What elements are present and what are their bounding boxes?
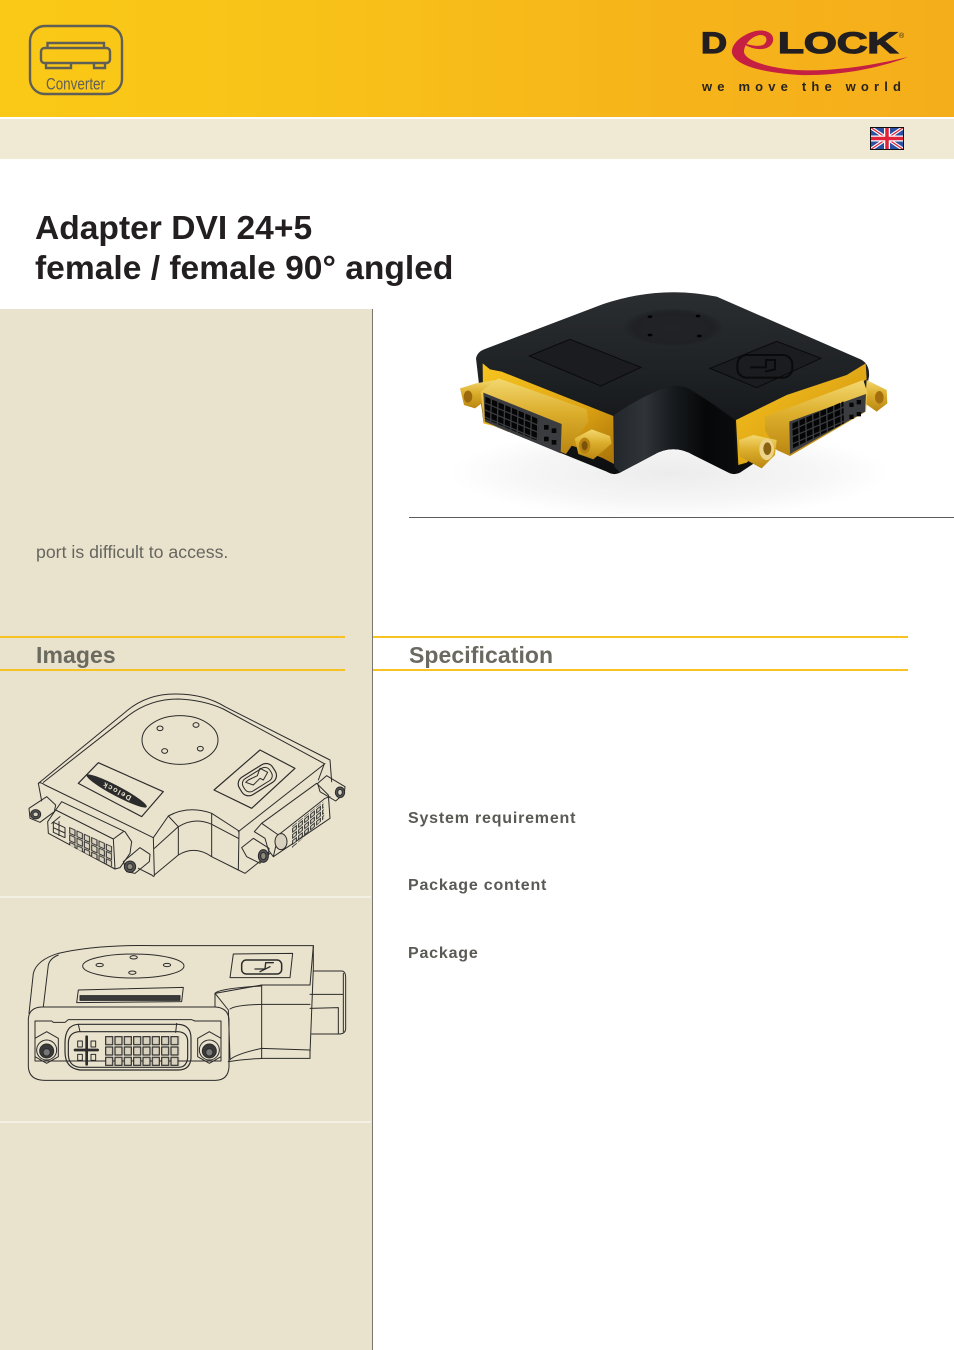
icon: UK flag — [870, 127, 904, 150]
title: Adapter DVI 24+5 — [35, 210, 312, 247]
body outline — [38, 694, 332, 783]
heading: Specification: Specification — [409, 642, 553, 668]
right screw back — [318, 776, 345, 801]
front face — [28, 1007, 229, 1080]
cross contact — [75, 1037, 98, 1064]
divider 2 — [0, 1121, 371, 1123]
top recessed circle — [623, 309, 723, 348]
product photo — [460, 292, 888, 504]
left screw back — [29, 797, 56, 822]
logo: Delock: D — [701, 27, 727, 60]
adapter body — [460, 292, 887, 474]
top circle — [142, 716, 218, 764]
right gold screw front — [739, 435, 777, 468]
logo imprint: Delock — [100, 780, 133, 803]
DVI plate — [214, 750, 295, 808]
left screw — [35, 1032, 58, 1063]
right insert — [789, 394, 866, 454]
swoosh — [732, 30, 908, 75]
logo: Delock: LOCK — [778, 27, 898, 60]
right gold screw back — [865, 380, 887, 412]
side connector — [310, 971, 346, 1034]
elbow — [153, 810, 239, 870]
right connector — [254, 783, 330, 857]
right screw — [198, 1032, 221, 1063]
title — [35, 210, 453, 287]
DVI plate — [230, 953, 293, 978]
panel: left column — [0, 309, 373, 1350]
label: package content: Package content — [408, 877, 547, 894]
left label plate — [529, 339, 641, 386]
right label plate — [710, 341, 821, 388]
body outline — [29, 945, 313, 1053]
label: system requirement: System requirement — [408, 810, 576, 827]
logo plate — [77, 987, 183, 1003]
left gold screw back — [460, 380, 495, 408]
header band — [0, 0, 954, 159]
logo plate — [78, 763, 163, 817]
heading: Images: Images — [36, 642, 116, 668]
left shell — [481, 378, 588, 454]
left insert — [483, 393, 562, 453]
top circle — [83, 954, 184, 978]
elbow side — [215, 986, 310, 1062]
logo: Delock — [701, 27, 908, 94]
icon: converter badge — [28, 24, 124, 96]
pin grid — [105, 1036, 180, 1067]
left screw front — [123, 848, 150, 873]
description text: port is difficult to access. — [36, 542, 228, 562]
logo imprint — [84, 771, 149, 811]
line drawing: isometric view — [28, 694, 346, 877]
elbow — [614, 386, 737, 473]
yellow gradient bar — [0, 0, 954, 117]
right screw front — [242, 838, 269, 863]
icon: converter badge: Converter — [46, 74, 105, 94]
left connector — [48, 802, 132, 869]
divider 1 — [0, 896, 371, 898]
line drawing: front view — [28, 945, 346, 1081]
logo: Delock: ® — [899, 32, 905, 40]
DVI shell — [65, 1024, 191, 1070]
title: female / female 90° angled — [35, 250, 453, 287]
floor shadow — [450, 428, 890, 518]
logo: Delock: we move the world — [701, 79, 901, 94]
label: package: Package — [408, 945, 479, 962]
left gold screw front — [575, 429, 612, 459]
cream sub-bar — [0, 119, 954, 159]
left gold plate — [483, 363, 614, 464]
dvi symbol — [737, 355, 792, 378]
divider under photo — [409, 517, 954, 518]
right shell — [765, 380, 867, 456]
right gold plate — [736, 363, 867, 465]
